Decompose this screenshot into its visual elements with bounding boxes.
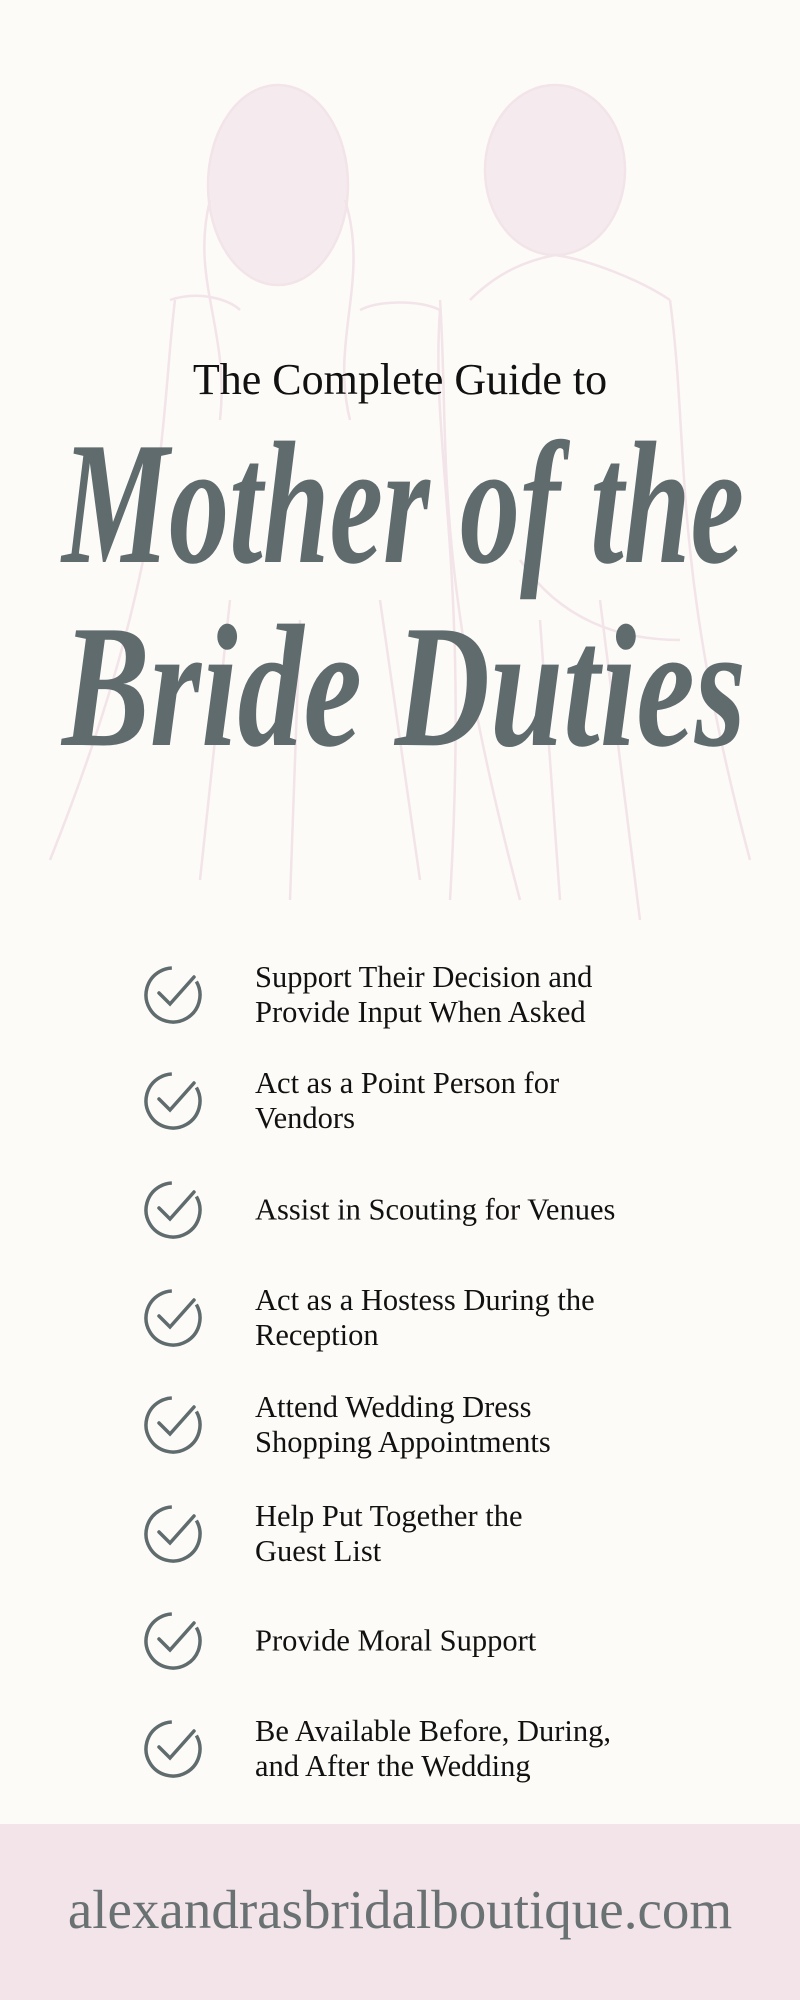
checklist item 5: [144, 1390, 551, 1459]
checklist item 8: and After the Wedding: [255, 1749, 531, 1783]
checklist item 7: [144, 1612, 536, 1670]
checklist item 6: [144, 1499, 523, 1568]
checklist item 3: [144, 1181, 615, 1239]
checklist item 4: Act as a Hostess During the: [255, 1283, 595, 1317]
footer with website: alexandrasbridalboutique.com: [68, 1879, 732, 1940]
checklist item 2: Vendors: [255, 1101, 355, 1135]
checklist item 2: Act as a Point Person for: [255, 1066, 559, 1100]
checklist item 1: Provide Input When Asked: [255, 995, 586, 1029]
checklist item 6: Guest List: [255, 1534, 381, 1568]
checklist item 6: Help Put Together the: [255, 1499, 523, 1533]
checklist item 5: Shopping Appointments: [255, 1425, 551, 1459]
subtitle: The Complete Guide to: [193, 355, 607, 404]
checklist item 8: [144, 1714, 611, 1783]
title: [60, 406, 746, 780]
checklist item 2: [144, 1066, 559, 1135]
checklist item 4: [144, 1283, 595, 1352]
checklist item 5: Attend Wedding Dress: [255, 1390, 532, 1424]
checklist item 1: Support Their Decision and: [255, 960, 592, 994]
background illustration: two brides: [49, 84, 751, 920]
checklist item 3: Assist in Scouting for Venues: [255, 1192, 615, 1226]
footer with website: [0, 1824, 800, 2000]
checklist item 8: Be Available Before, During,: [255, 1714, 611, 1748]
checklist item 1: [144, 960, 592, 1029]
checklist item 4: Reception: [255, 1318, 379, 1352]
checklist item 7: Provide Moral Support: [255, 1624, 536, 1658]
